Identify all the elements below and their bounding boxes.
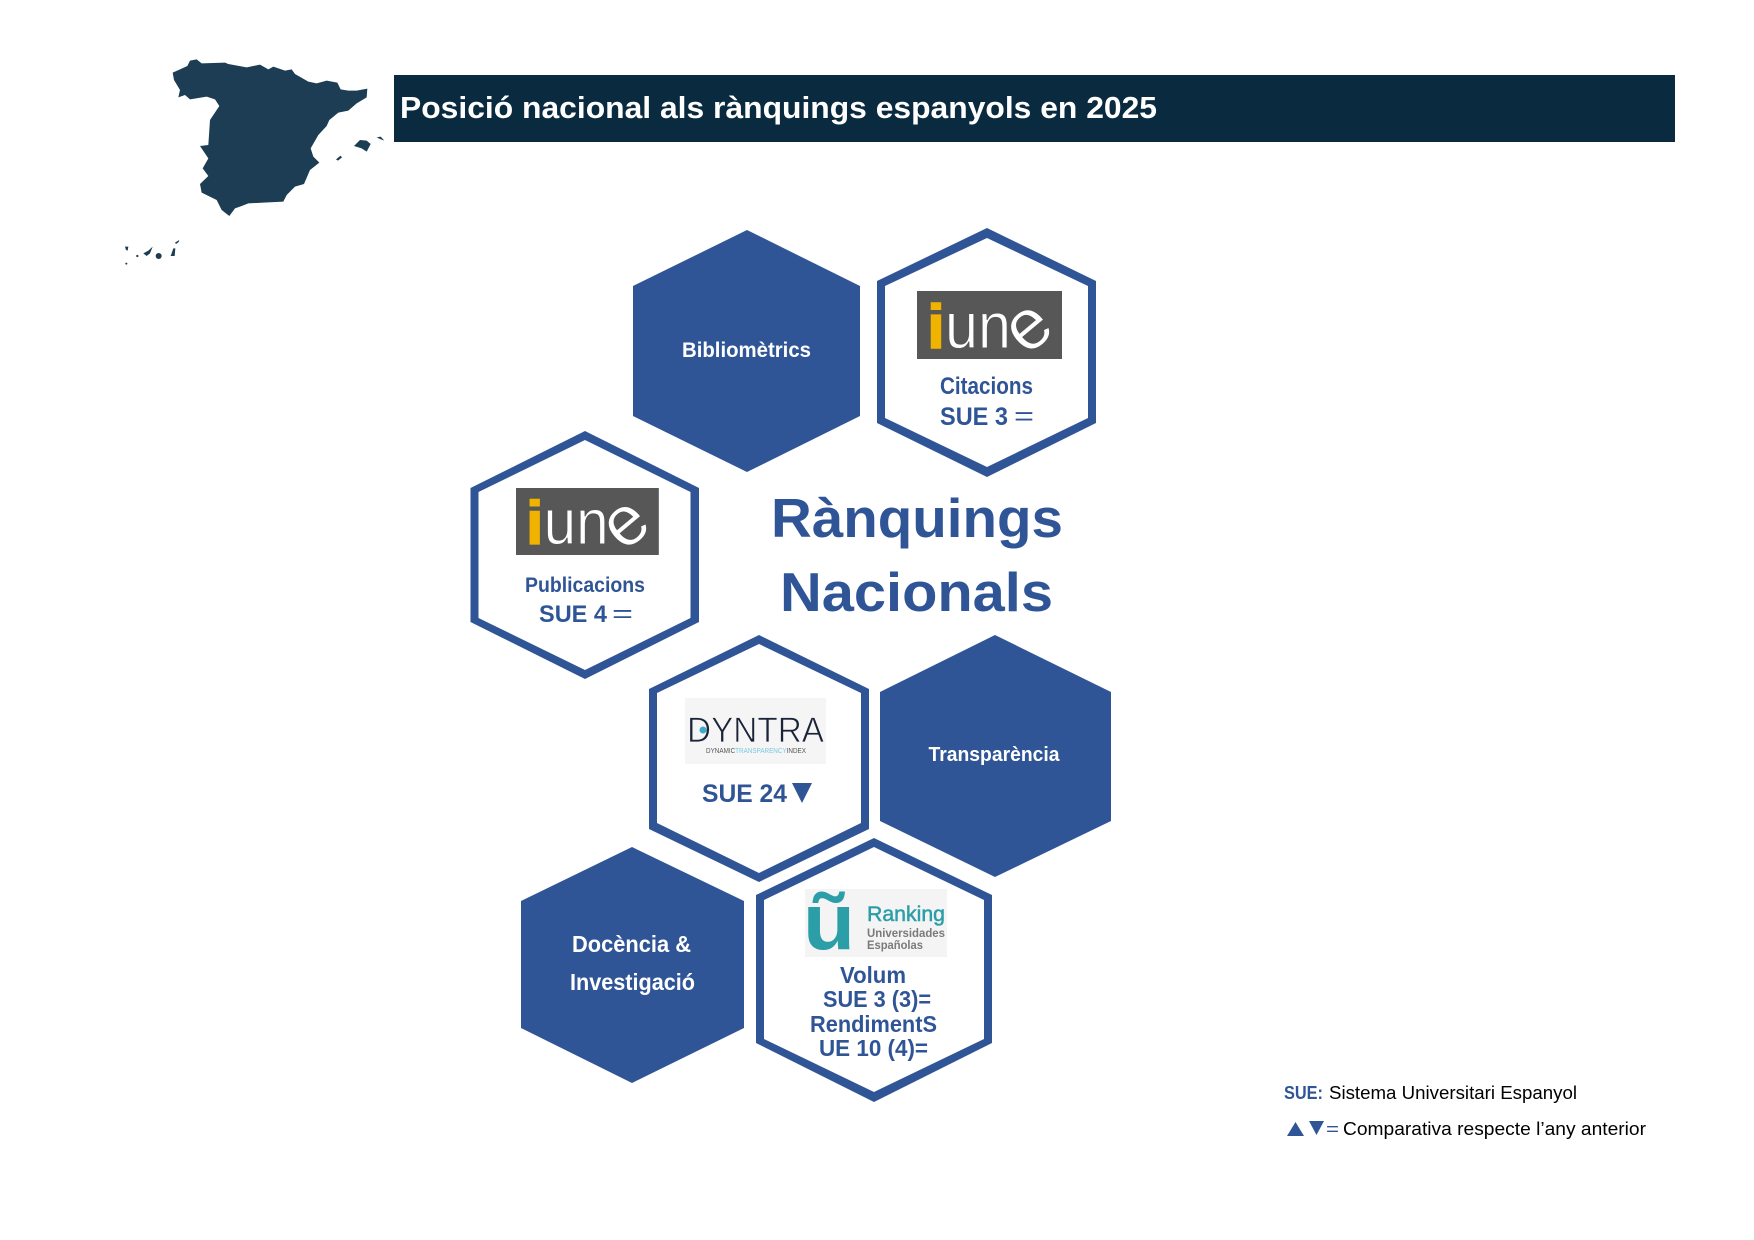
hexagon: Transparència (880, 635, 1111, 877)
logo: iune: i (927, 293, 945, 362)
hexagon: Ranking Universidades Españolas: Volum (840, 962, 906, 988)
hexagon: Ranking Universidades Españolas: RendimentS (810, 1011, 937, 1037)
hexagon: Transparència: Transparència (928, 744, 1060, 766)
logo: U-Ranking: Ranking (867, 903, 945, 926)
hexagon: Ranking Universidades Españolas: UE 10 (4)= (819, 1035, 928, 1061)
logo: Dyntra (685, 698, 826, 764)
hexagon: Docència & Investigació: Docència & (572, 931, 691, 957)
logo: Dyntra: DYNAMICTRANSPARENCYINDEX (706, 748, 806, 755)
hexagon: IUNE Publicacions: = (612, 600, 633, 628)
hexagon: Ranking Universidades Españolas: SUE 3 (3)= (823, 986, 931, 1012)
logo: U-Ranking: ũ (803, 877, 855, 966)
title: Posició nacional als rànquings espanyols en 2025 (400, 90, 1157, 125)
logo: iune (516, 479, 664, 565)
hexagon: IUNE Publicacions: Publicacions (525, 574, 645, 597)
header bar (394, 75, 1675, 142)
logo: U-Ranking (803, 877, 947, 966)
hexagon: Bibliomètrics: Bibliomètrics (682, 339, 811, 362)
legend (1284, 1083, 1646, 1139)
legend: SUE definition: Sistema Universitari Espanyol (1329, 1083, 1577, 1103)
hexagon: IUNE Citacions: Citacions (940, 373, 1033, 400)
hexagon: DYNTRA: SUE 24 (702, 780, 787, 808)
logo: iune: e (583, 479, 664, 565)
icon: down triangle (792, 783, 812, 803)
hexagon: IUNE Citacions: = (1014, 401, 1034, 431)
legend: comparison: Comparativa respecte l’any anterior (1343, 1119, 1646, 1139)
hexagon: IUNE Citacions (877, 228, 1096, 477)
logo: iune: i (526, 489, 544, 557)
hexagon: IUNE Citacions: SUE 3 (940, 403, 1008, 431)
logo: iune: un (945, 289, 1011, 362)
hexagon: DYNTRA (649, 635, 869, 882)
hexagon: Bibliomètrics (633, 230, 860, 472)
icon: map of Spain (125, 59, 384, 265)
hexagon: Docència & Investigació (521, 847, 744, 1083)
logo: U-Ranking: Españolas (867, 938, 923, 952)
hexagon: Docència & Investigació: Investigació (570, 969, 695, 995)
logo: iune (917, 282, 1068, 369)
legend: equals sign: = (1326, 1119, 1339, 1139)
central title (771, 487, 1063, 623)
icon: up triangle (1287, 1122, 1304, 1136)
hexagon: IUNE Publicacions: SUE 4 (539, 601, 608, 628)
legend: SUE label: SUE: (1284, 1083, 1323, 1103)
icon: down triangle (1309, 1121, 1324, 1135)
hexagon: IUNE Publicacions (470, 431, 699, 679)
logo: iune: un (544, 486, 609, 558)
hexagon: Ranking Universidades Españolas (756, 838, 992, 1102)
logo: iune: e (985, 282, 1068, 369)
central title: Rànquings (771, 487, 1063, 549)
logo: Dyntra: DYNTRA (687, 711, 825, 750)
logo: U-Ranking: Universidades (867, 926, 945, 940)
central title: Nacionals (780, 561, 1053, 623)
